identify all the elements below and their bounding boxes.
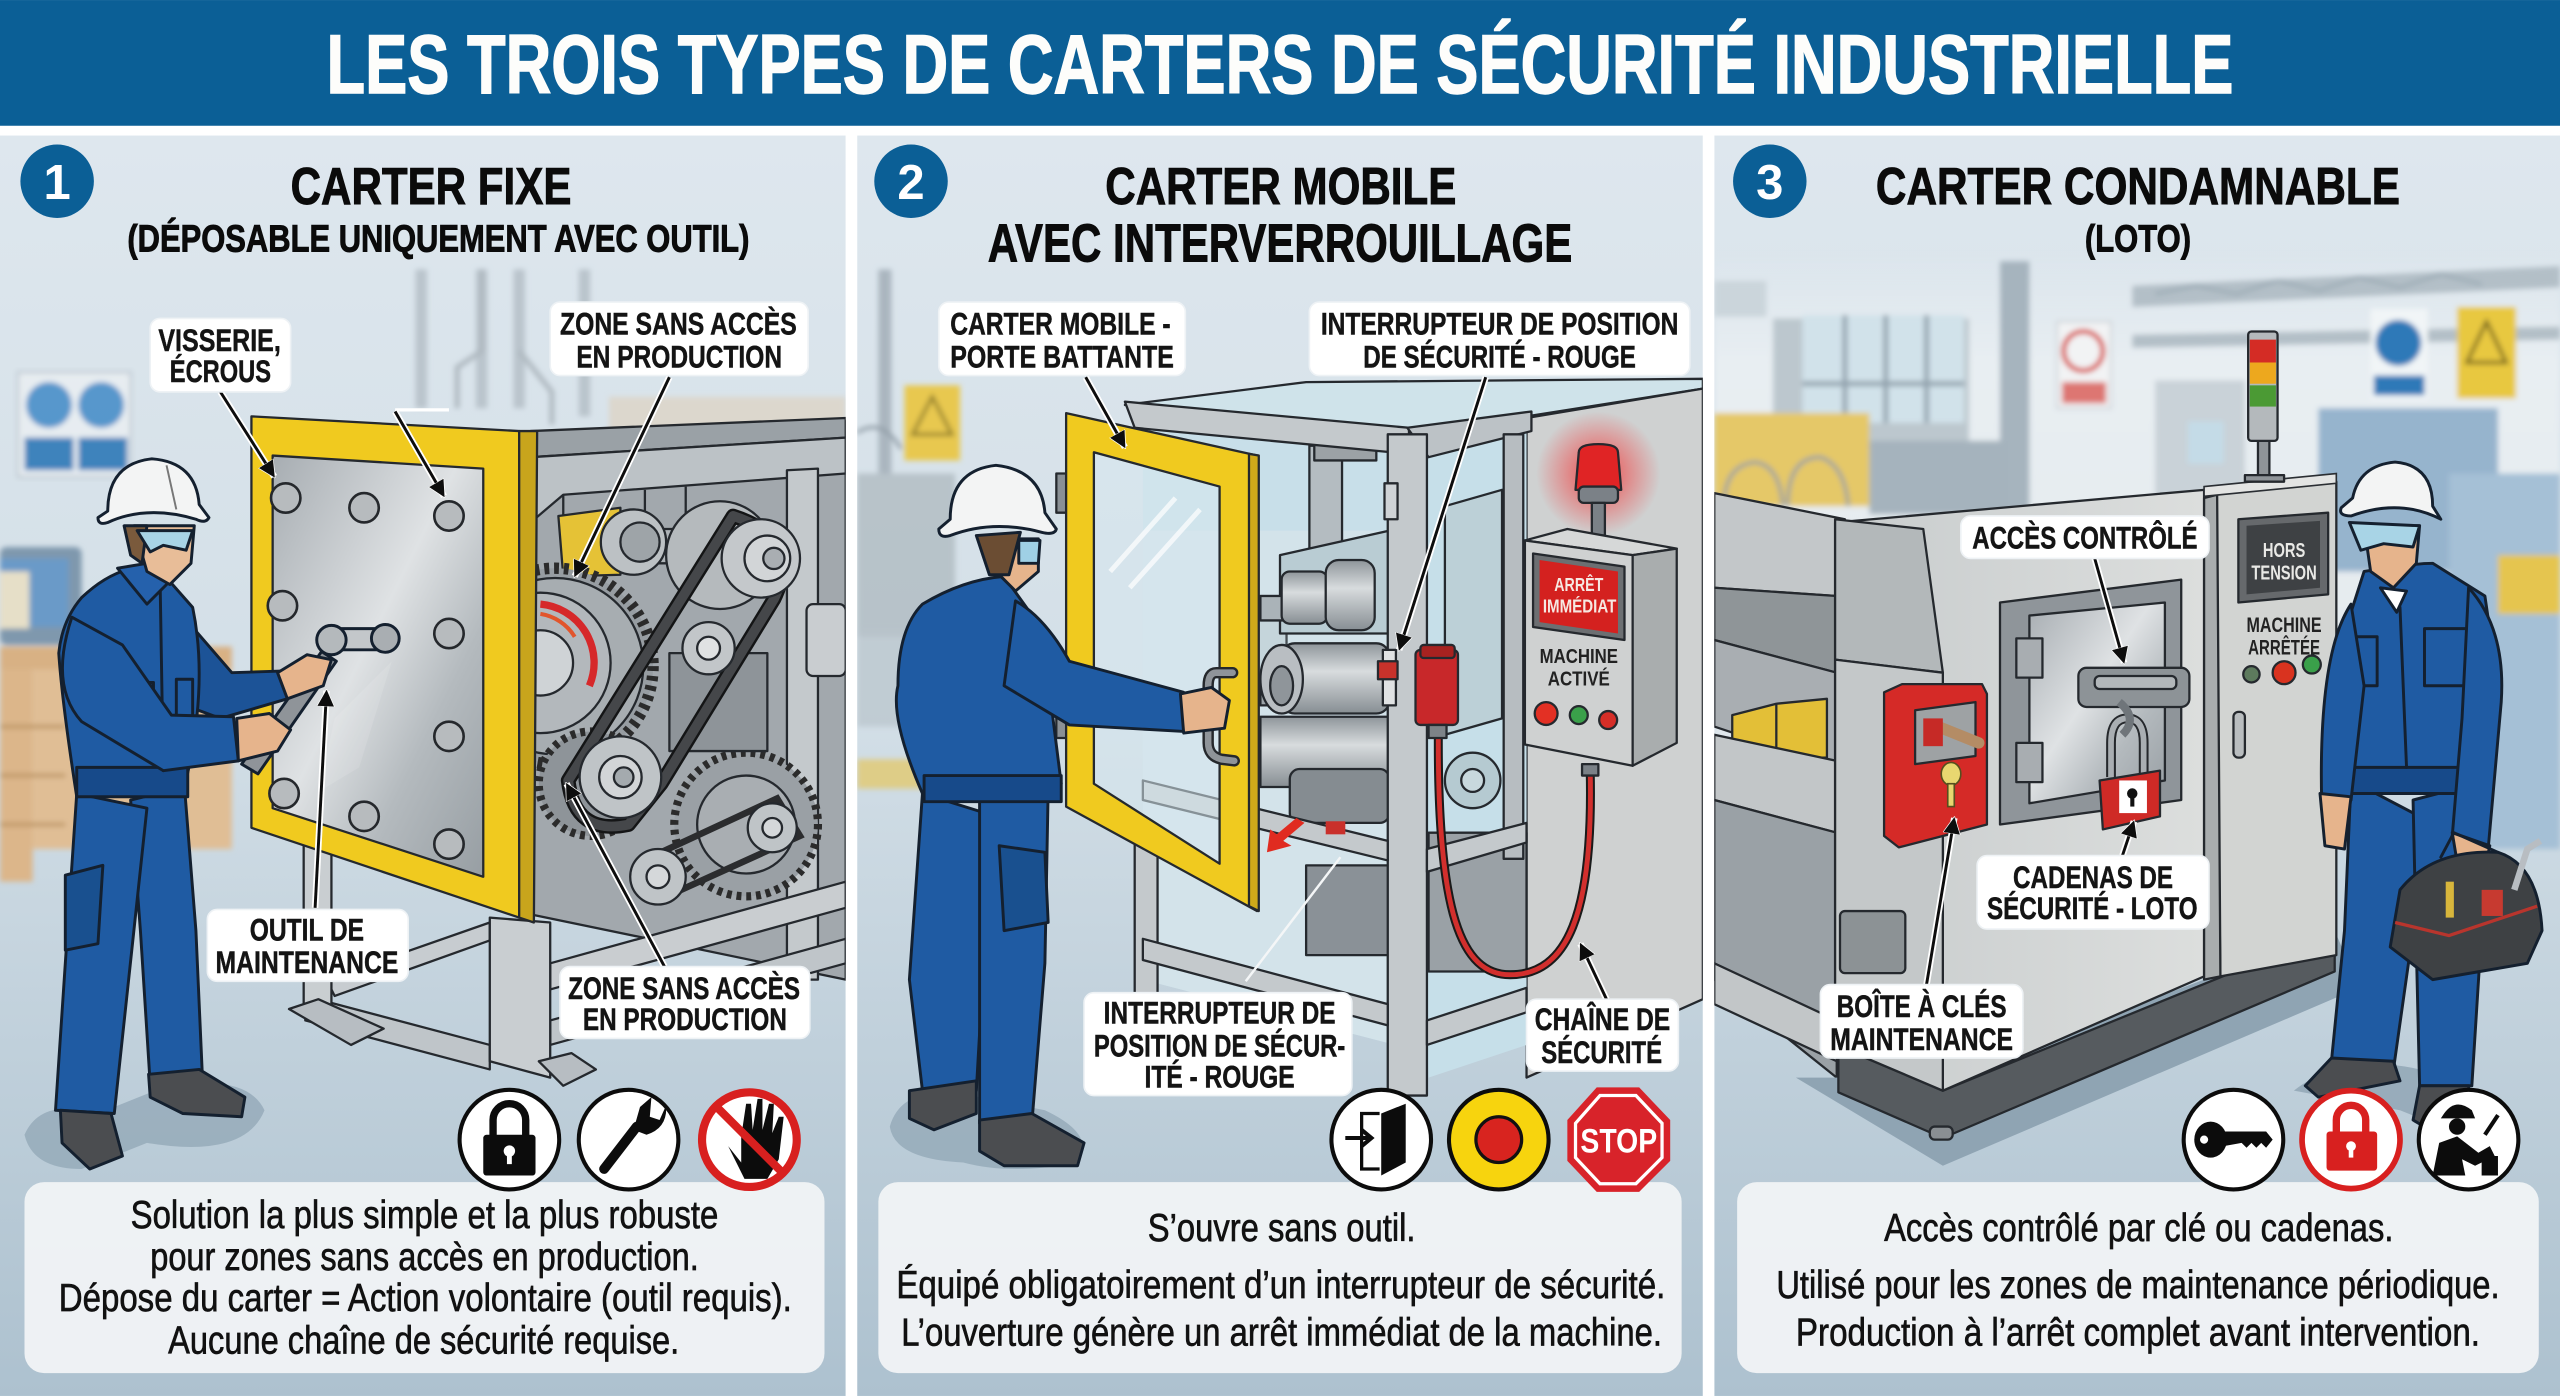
panel: carter condamnable <box>1714 136 2560 1396</box>
factory background <box>0 269 846 882</box>
caption panel 1: Aucune chaîne de sécurité requise. <box>168 1320 679 1363</box>
safety chain cable <box>1438 727 1590 975</box>
caption panel 3: Accès contrôlé par clé ou cadenas. <box>1884 1207 2393 1250</box>
label: interrupteur bottom: POSITION DE SÉCUR- <box>1094 1028 1345 1063</box>
gears <box>536 562 659 768</box>
label: boîte à clés: MAINTENANCE <box>1830 1022 2013 1057</box>
label: carter mobile: PORTE BATTANTE <box>950 339 1174 374</box>
caption panel 2: L’ouverture génère un arrêt immédiat de la machine. <box>901 1311 1662 1354</box>
aluminium frame <box>1125 402 1409 454</box>
machine body <box>1796 474 2359 1166</box>
red padlock <box>2100 771 2160 829</box>
caption panel 1: Dépose du carter = Action volontaire (outil requis). <box>59 1277 792 1320</box>
beacon <box>1536 411 1660 536</box>
label: visserie: ÉCROUS <box>170 354 271 389</box>
locked access door <box>2000 580 2189 829</box>
label: zone sans accès top: ZONE SANS ACCÈS <box>560 307 797 342</box>
machine body: MACHINE <box>2247 614 2322 637</box>
machine body: ARRÊTÉE <box>2248 635 2320 660</box>
factory background <box>857 267 964 792</box>
number badge 3: 3 <box>1756 156 1783 210</box>
caption panel 2: S’ouvre sans outil. <box>1148 1207 1416 1250</box>
safety sign EPI <box>18 372 131 477</box>
yellow fixed guard <box>251 416 537 922</box>
icon: wrench <box>579 1090 678 1189</box>
label: accès contrôlé: ACCÈS CONTRÔLÉ <box>1972 520 2198 556</box>
icon: stop sign: STOP <box>1580 1123 1657 1161</box>
icon: padlock <box>460 1090 559 1189</box>
control box <box>1525 529 1677 776</box>
heading panel 3: CARTER CONDAMNABLE <box>1876 158 2400 216</box>
machine body: TENSION <box>2251 563 2317 585</box>
number badge 1: 1 <box>44 156 71 210</box>
factory background <box>1714 253 2560 849</box>
icon: red padlock <box>2302 1091 2400 1189</box>
tower light <box>2245 331 2284 482</box>
icon: emergency button <box>1449 1090 1549 1189</box>
caption panel 1: Solution la plus simple et la plus robuste <box>131 1194 718 1237</box>
worker with toolbag <box>2294 462 2542 1135</box>
label: boîte à clés <box>1820 818 2023 1058</box>
heading panel 1 <box>127 158 749 259</box>
label: interrupteur bottom: ITÉ - ROUGE <box>1144 1059 1295 1094</box>
heading panel 2: AVEC INTERVERROUILLAGE <box>988 213 1572 273</box>
rollers <box>1260 488 1528 973</box>
conveyor left <box>1714 493 1845 1078</box>
label: interrupteur bottom: INTERRUPTEUR DE <box>1104 996 1336 1031</box>
heading panel 3 <box>1876 158 2400 259</box>
label: zone sans accès top <box>550 302 808 576</box>
label: chaîne de sécurité: SÉCURITÉ <box>1541 1035 1662 1070</box>
caption panel 2 <box>878 1182 1682 1373</box>
label: zone sans accès bottom: EN PRODUCTION <box>583 1002 787 1037</box>
icon: no hand <box>702 1092 797 1187</box>
machine enclosure <box>1125 379 1703 1096</box>
red interlock switch <box>1416 645 1458 738</box>
red open arrow and lower switch <box>1246 818 1345 981</box>
icon: stop sign <box>1567 1087 1670 1192</box>
control box: ARRÊT <box>1554 574 1604 595</box>
label: outil de maintenance: MAINTENANCE <box>216 945 398 980</box>
label: accès contrôlé <box>1961 516 2209 663</box>
label: chaîne de sécurité <box>1527 944 1678 1071</box>
pulleys <box>722 519 800 598</box>
label: interrupteur top: DE SÉCURITÉ - ROUGE <box>1363 339 1636 374</box>
control box: MACHINE <box>1540 646 1618 668</box>
label: cadenas: CADENAS DE <box>2013 860 2173 895</box>
machine body: HORS <box>2263 540 2305 562</box>
title banner <box>0 0 2560 126</box>
shaft and rear pulley <box>658 528 672 564</box>
label: cadenas: SÉCURITÉ - LOTO <box>1987 891 2198 926</box>
label: interrupteur top <box>1309 302 1690 650</box>
number badge 2: 2 <box>897 156 925 210</box>
panel: carter fixe <box>0 136 846 1396</box>
label: zone sans accès bottom: ZONE SANS ACCÈS <box>568 971 800 1006</box>
toolbag <box>2390 833 2542 980</box>
label: interrupteur bottom <box>1084 993 1352 1096</box>
number badge 3 <box>1733 145 1807 218</box>
caption panel 2: Équipé obligatoirement d’un interrupteur de sécurité. <box>896 1264 1665 1307</box>
heading panel 1: CARTER FIXE <box>291 158 571 216</box>
machine frame and drive <box>289 418 846 1086</box>
number badge 1 <box>20 145 94 218</box>
panel: carter mobile <box>857 136 1703 1396</box>
bolts <box>268 483 464 859</box>
caption panel 3 <box>1737 1182 2539 1373</box>
icon: door <box>1331 1090 1431 1189</box>
worker from behind <box>890 465 1229 1169</box>
heading panel 1: (DÉPOSABLE UNIQUEMENT AVEC OUTIL) <box>127 217 749 259</box>
wrench <box>242 625 399 774</box>
icon: key <box>2184 1090 2283 1189</box>
heading panel 2: CARTER MOBILE <box>1105 158 1456 216</box>
label: cadenas <box>1977 821 2209 929</box>
label: outil de maintenance: OUTIL DE <box>250 912 364 947</box>
heading panel 3: (LOTO) <box>2085 217 2191 259</box>
label: boîte à clés: BOÎTE À CLÉS <box>1837 988 2007 1024</box>
label: carter mobile <box>939 302 1185 447</box>
belts <box>568 516 783 826</box>
control box: IMMÉDIAT <box>1543 595 1617 616</box>
heading panel 2 <box>988 158 1572 273</box>
electrical cabinet <box>2214 482 2336 976</box>
icon: maintenance worker <box>2419 1090 2518 1189</box>
label: outil de maintenance <box>207 691 408 981</box>
label: visserie: VISSERIE, <box>158 323 281 358</box>
caption panel 1: pour zones sans accès en production. <box>150 1236 699 1279</box>
label: zone sans accès bottom <box>560 784 810 1038</box>
worker with wrench <box>24 459 399 1169</box>
red key box <box>1884 684 1987 847</box>
label: zone sans accès top: EN PRODUCTION <box>576 339 782 374</box>
control box: ACTIVÉ <box>1548 668 1610 691</box>
yellow swinging door <box>1056 413 1259 911</box>
caption panel 1 <box>24 1182 824 1373</box>
label: visserie <box>150 318 449 496</box>
label: carter mobile: CARTER MOBILE - <box>950 307 1171 342</box>
label: chaîne de sécurité: CHAÎNE DE <box>1535 1001 1670 1037</box>
label: interrupteur top: INTERRUPTEUR DE POSITION <box>1321 307 1678 342</box>
number badge 2 <box>874 145 948 218</box>
